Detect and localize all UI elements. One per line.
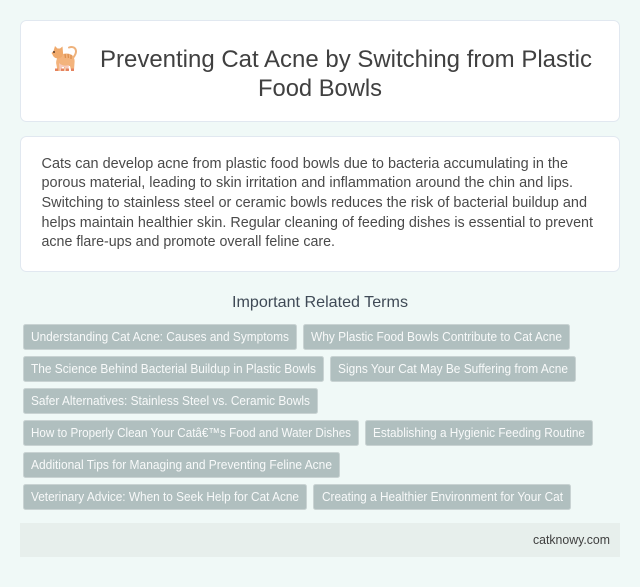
text block: description: Cats can develop acne from plastic food bowls due to bacteria accumulating in the [42,156,568,172]
tag [24,484,306,510]
tag [24,452,340,478]
title: Preventing Cat Acne by Switching from Plastic [100,46,592,73]
tag [24,324,296,350]
tag [366,420,592,446]
tag: Additional Tips for Managing and Preventing Feline Acne [31,457,332,472]
panel: description [20,136,620,272]
text block: description: porous material, leading to skin irritation and inflammation around the chin and lips. [42,175,573,191]
tag: Signs Your Cat May Be Suffering from Acne [338,361,568,376]
title [100,46,592,102]
footer: catknowy.com [533,532,610,547]
tag: Veterinary Advice: When to Seek Help for Cat Acne [31,489,299,504]
tag: Creating a Healthier Environment for Your Cat [322,489,563,504]
tag [304,324,570,350]
tag: Establishing a Hygienic Feeding Routine [373,425,585,440]
tag: Safer Alternatives: Stainless Steel vs. Ceramic Bowls [31,393,310,408]
tag: Understanding Cat Acne: Causes and Symptoms [31,329,289,344]
text block: description [42,156,593,250]
footer [20,523,620,557]
text block: description: acne flare-ups and promote overall feline care. [42,234,335,250]
tag: The Science Behind Bacterial Buildup in Plastic Bowls [31,361,316,376]
text block: description: Switching to stainless steel or ceramic bowls reduces the risk of bacterial buildup and [42,195,587,211]
tag [24,420,358,446]
tag [24,356,324,382]
icon: cat [52,46,76,71]
tag [330,356,576,382]
tag list [24,324,592,510]
tag: How to Properly Clean Your Catâ€™s Food and Water Dishes [31,425,351,440]
panel: title card [20,20,620,122]
title: Food Bowls [258,75,382,102]
tag [314,484,570,510]
tag [24,388,318,414]
heading: related terms: Important Related Terms [232,294,408,311]
tag: Why Plastic Food Bowls Contribute to Cat Acne [311,329,562,344]
text block: description: helps maintain healthier skin. Regular cleaning of feeding dishes is essential to prevent [42,215,593,231]
